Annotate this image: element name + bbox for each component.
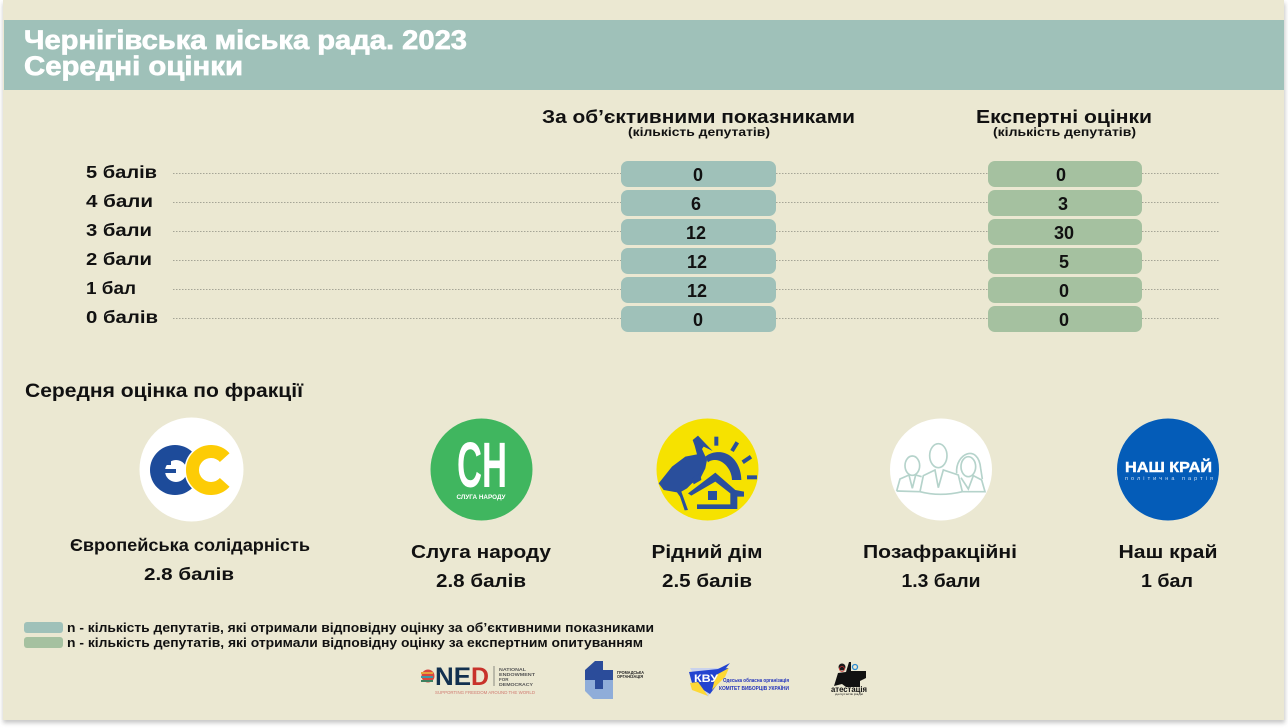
faction: European Solidarity: Європейська солідарність: [70, 535, 310, 555]
icon: Our Land: [1117, 418, 1219, 520]
icon: Our Land: політична партія: [1125, 476, 1213, 482]
title banner: [4, 20, 1284, 90]
heading: faction average: Середня оцінка по фракції: [25, 381, 304, 402]
faction: Non-faction: 1.3 бали: [902, 570, 980, 591]
logo: Committee of Voters of Ukraine: [689, 663, 789, 697]
expert scores column: [988, 161, 1142, 332]
legend: n - кількість депутатів, які отримали відповідну оцінку за об’єктивними показниками: [67, 620, 654, 635]
score row labels: 1 бал: [86, 278, 136, 298]
faction: European Solidarity: [70, 535, 310, 584]
logo: civic organisation: ОРГАНІЗАЦІЯ: [617, 674, 643, 679]
score row labels: 2 бали: [86, 249, 152, 269]
expert scores column: 0: [1059, 281, 1069, 301]
heading: objective column: (кількість депутатів): [628, 127, 770, 139]
faction: Native Home: [652, 541, 762, 591]
heading: expert column: Експертні оцінки: [976, 107, 1152, 127]
icon: Our Land: НАШ КРАЙ: [1125, 458, 1212, 476]
title banner: Чернігівська міська рада. 2023: [24, 25, 467, 55]
objective scores column: 12: [687, 252, 707, 272]
objective scores column: 0: [693, 165, 703, 185]
expert scores column: 5: [1059, 252, 1069, 272]
faction: Servant of the People: 2.8 балів: [436, 570, 526, 591]
icon: European Solidarity: [140, 418, 244, 522]
logo: NED: [421, 663, 536, 695]
score row labels: [86, 162, 158, 327]
faction: Our Land: [1118, 541, 1218, 591]
objective scores column: 6: [691, 194, 701, 214]
icon: Native Home: [656, 418, 758, 520]
faction: European Solidarity: 2.8 балів: [144, 564, 234, 584]
heading: objective column: [542, 107, 855, 139]
faction: Servant of the People: Слуга народу: [411, 541, 552, 562]
expert scores column: 3: [1058, 194, 1068, 214]
logo: civic organisation: [585, 661, 644, 699]
score row labels: 0 балів: [86, 307, 158, 327]
logo: Committee of Voters of Ukraine: КОМІТЕТ ВИБОРЦІВ УКРАЇНИ: [719, 685, 789, 692]
expert scores column: 0: [1059, 310, 1069, 330]
logo: NED: DEMOCRACY: [499, 682, 533, 687]
expert scores column: 30: [1054, 223, 1074, 243]
objective scores column: 0: [693, 310, 703, 330]
score row labels: 4 бали: [86, 191, 153, 211]
logo: Attestation: атестація: [831, 685, 867, 694]
logo: civic organisation: ГРОМАДСЬКА: [617, 670, 644, 675]
expert scores column: 0: [1056, 165, 1066, 185]
faction: Native Home: Рідний дім: [652, 541, 762, 562]
heading: expert column: (кількість депутатів): [993, 127, 1136, 139]
objective scores column: 12: [687, 281, 707, 301]
logo: NED: D: [471, 663, 489, 691]
heading: objective column: За об’єктивними показниками: [542, 107, 855, 127]
logo: NED: NATIONAL: [499, 667, 526, 672]
score row labels: 5 балів: [86, 162, 157, 182]
logo: Committee of Voters of Ukraine: Одеська обласна організація: [723, 677, 789, 684]
faction: Non-faction: Позафракційні: [863, 541, 1017, 562]
logo: NED: NE: [435, 663, 471, 691]
faction: Native Home: 2.5 балів: [662, 570, 752, 591]
icon: Non-faction: [890, 418, 992, 520]
title banner: Середні оцінки: [24, 51, 243, 81]
icon: Servant of the People: СН: [457, 429, 507, 501]
score row labels: 3 бали: [86, 220, 152, 240]
faction: Our Land: Наш край: [1118, 541, 1218, 562]
icon: Servant of the People: СЛУГА НАРОДУ: [456, 494, 506, 501]
faction: Servant of the People: [411, 541, 552, 591]
heading: expert column: [976, 107, 1152, 139]
logo: NED: ENDOWMENT: [499, 672, 535, 677]
faction: Our Land: 1 бал: [1141, 570, 1193, 591]
objective scores column: [621, 161, 776, 332]
legend: [24, 620, 654, 650]
logo: NED: SUPPORTING FREEDOM AROUND THE WORLD: [435, 690, 536, 695]
objective scores column: 12: [686, 223, 706, 243]
logo: Attestation: депутатів ради: [835, 693, 864, 696]
legend: n - кількість депутатів, які отримали відповідну оцінку за експертним опитуванням: [67, 635, 643, 650]
logo: Committee of Voters of Ukraine: КВУ: [694, 673, 718, 685]
logo: Attestation: [831, 662, 867, 696]
icon: Servant of the People: [430, 418, 532, 520]
faction: Non-faction: [863, 541, 1017, 591]
logo: NED: FOR: [499, 677, 509, 682]
